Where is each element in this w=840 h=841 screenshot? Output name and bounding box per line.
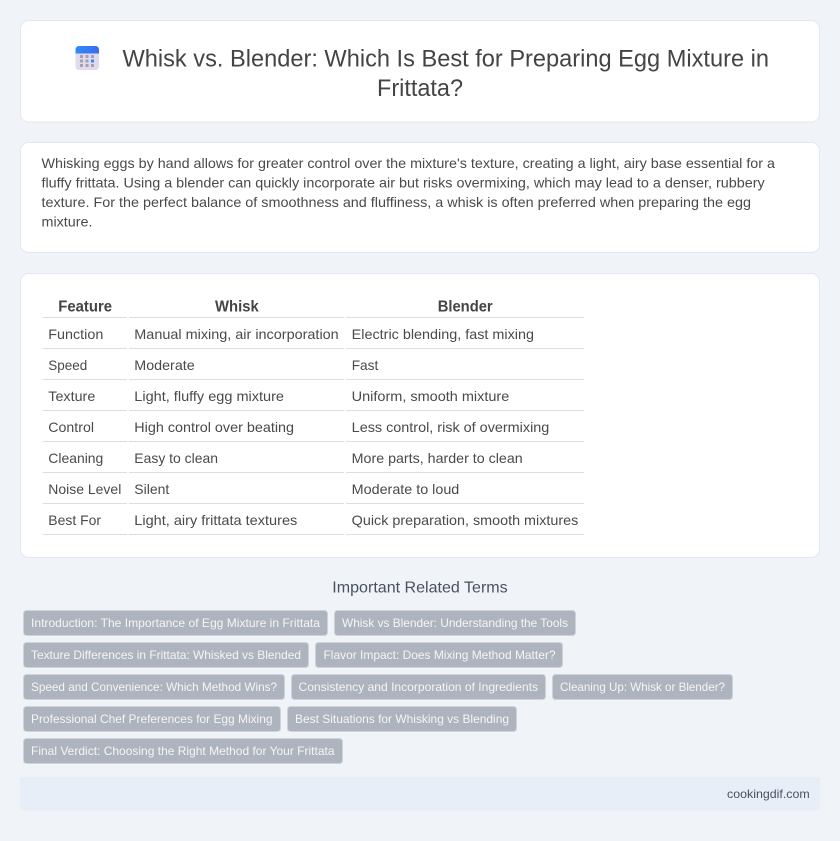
table row: best for: Light, airy frittata textures <box>134 512 297 528</box>
table row: cleaning <box>43 450 584 473</box>
panel: header <box>20 20 820 122</box>
table row: texture: Light, fluffy egg mixture <box>134 388 284 404</box>
table row: function: Electric blending, fast mixing <box>352 326 534 342</box>
footer source text: cookingdif.com <box>727 787 810 801</box>
table row: best for: Quick preparation, smooth mixtures <box>352 512 578 528</box>
tag <box>24 706 280 732</box>
table row: best for: Best For <box>48 512 101 528</box>
table row: function <box>43 326 584 349</box>
table row: speed: Fast <box>352 357 378 373</box>
tag <box>316 642 562 668</box>
table row: noise level: Noise Level <box>48 481 121 497</box>
table row: texture: Texture <box>48 388 96 404</box>
table row: control: Control <box>48 419 94 435</box>
table row: noise level: Silent <box>134 481 169 497</box>
tag: Final Verdict: Choosing the Right Method for Your Frittata <box>31 744 335 758</box>
tag: Flavor Impact: Does Mixing Method Matter? <box>324 648 556 662</box>
tag <box>24 738 342 764</box>
tag: Introduction: The Importance of Egg Mixture in Frittata <box>31 616 320 630</box>
table header row: Blender <box>438 299 493 316</box>
table row: noise level: Moderate to loud <box>352 481 459 497</box>
table row: control <box>43 419 584 442</box>
tag <box>552 674 732 700</box>
text block: introduction paragraph <box>42 155 775 230</box>
icon: calendar <box>76 46 99 70</box>
table row: cleaning: Easy to clean <box>134 450 218 466</box>
table row: speed: Speed <box>48 357 87 373</box>
table row: texture: Uniform, smooth mixture <box>352 388 510 404</box>
table row: function: Manual mixing, air incorporation <box>134 326 339 342</box>
table row: control: High control over beating <box>134 419 294 435</box>
tag <box>24 674 284 700</box>
tag <box>334 610 576 636</box>
text block: introduction paragraph: mixture. <box>42 214 92 230</box>
table row: cleaning: Cleaning <box>48 450 103 466</box>
table row: best for <box>43 512 584 535</box>
heading: important related terms: Important Related Terms <box>332 580 508 597</box>
panel: related term tags <box>24 610 732 764</box>
title <box>122 46 769 102</box>
table row: control: Less control, risk of overmixing <box>352 419 549 435</box>
footer <box>20 777 820 810</box>
table row: cleaning: More parts, harder to clean <box>352 450 523 466</box>
table row: speed <box>43 357 584 380</box>
tag: Best Situations for Whisking vs Blending <box>295 712 509 726</box>
tag: Texture Differences in Frittata: Whisked vs Blended <box>31 648 301 662</box>
text block: introduction paragraph: texture. For the perfect balance of smoothness and fluffiness, a whisk is often preferred when preparing the egg <box>42 194 751 210</box>
table row: noise level <box>43 481 584 504</box>
title: Frittata? <box>377 75 463 102</box>
tag: Professional Chef Preferences for Egg Mixing <box>31 712 272 726</box>
title: Whisk vs. Blender: Which Is Best for Preparing Egg Mixture in <box>122 46 769 73</box>
tag <box>24 610 328 636</box>
text block: introduction paragraph: fluffy frittata. Using a blender can quickly incorporate air but risks overmixing, which may lead to a denser, rubbery <box>42 174 765 190</box>
table header row <box>43 299 584 318</box>
tag: Consistency and Incorporation of Ingredients <box>298 680 538 694</box>
table row: function: Function <box>48 326 103 342</box>
panel: introduction <box>20 142 820 252</box>
tag: Speed and Convenience: Which Method Wins? <box>31 680 277 694</box>
tag <box>24 642 308 668</box>
table row: speed: Moderate <box>134 357 195 373</box>
table header row: Feature <box>58 299 112 316</box>
table header row: Whisk <box>215 299 259 316</box>
tag: Cleaning Up: Whisk or Blender? <box>560 680 725 694</box>
panel: comparison table <box>20 274 820 558</box>
table row: texture <box>43 388 584 411</box>
tag <box>292 674 546 700</box>
text block: introduction paragraph: Whisking eggs by hand allows for greater control over the mixture's texture, creating a light, airy base essential for a <box>42 155 775 171</box>
tag <box>288 706 516 732</box>
tag: Whisk vs Blender: Understanding the Tools <box>342 616 568 630</box>
